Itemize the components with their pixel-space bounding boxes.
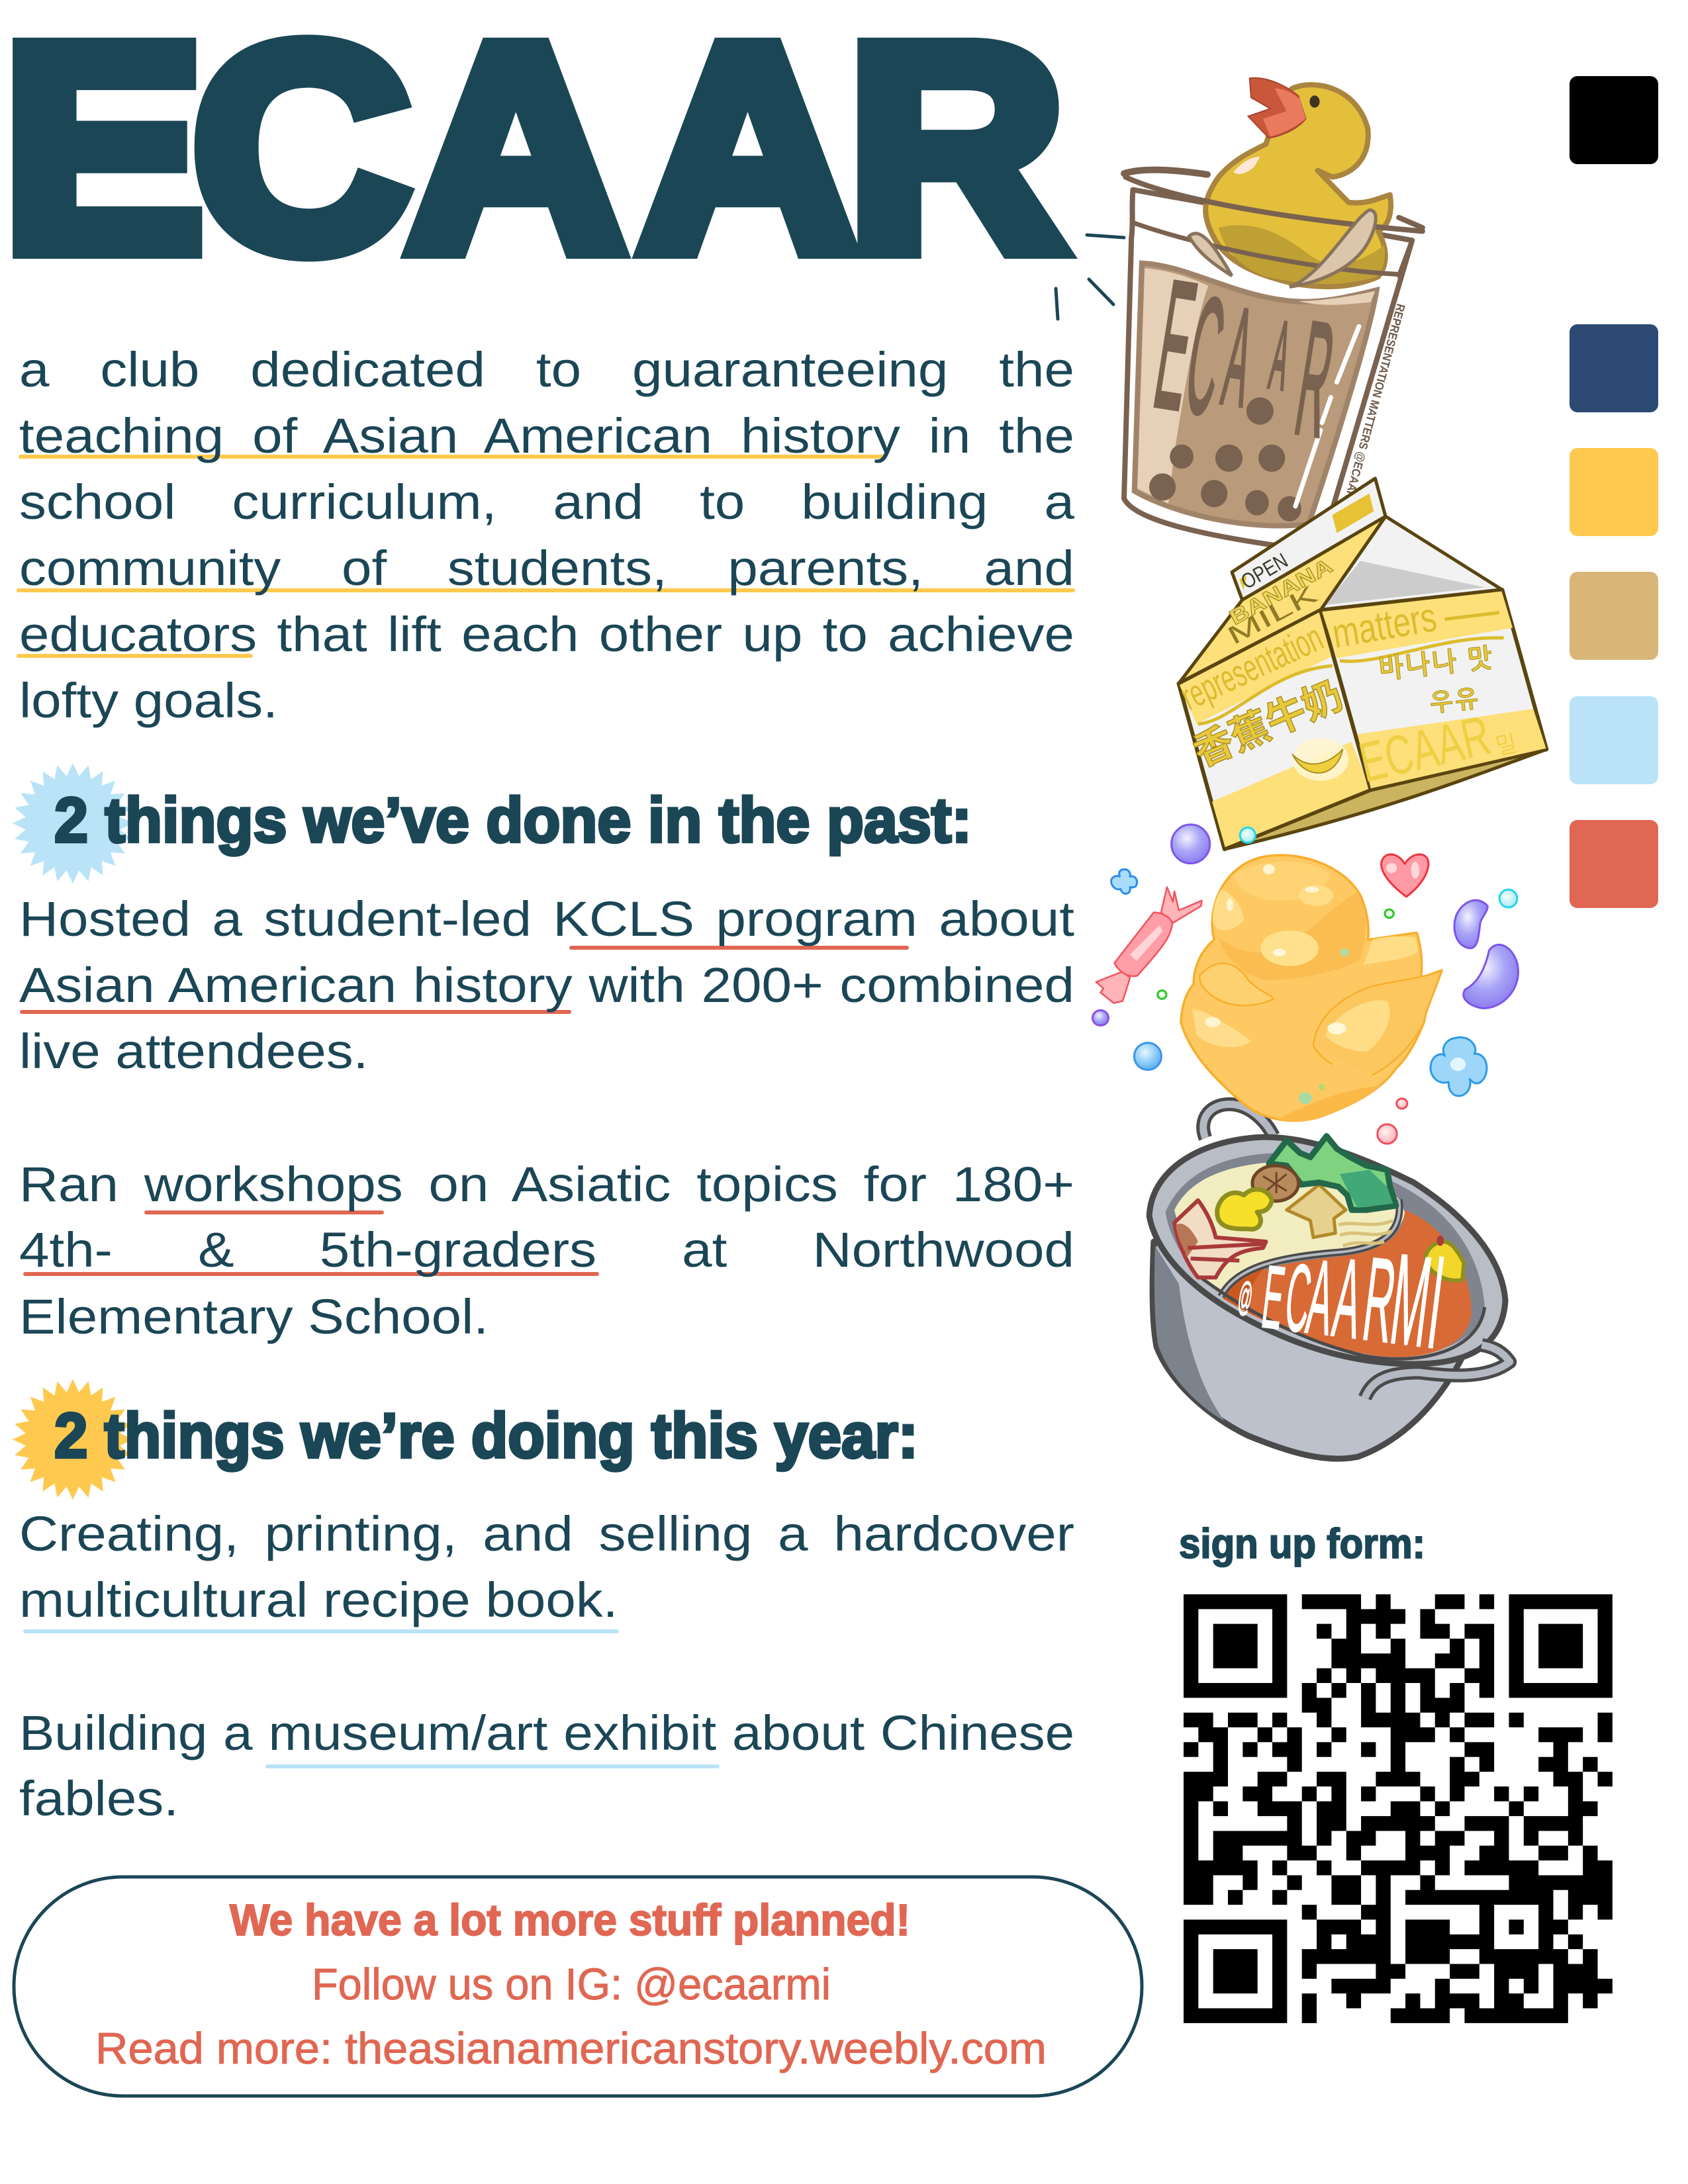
candy <box>1096 887 1202 1003</box>
text block: club description: community of students, parents, and <box>19 541 1074 596</box>
carton lettering: BANANA <box>1225 553 1336 629</box>
cup lettering: R <box>1287 287 1344 471</box>
callout: plans and links <box>14 1877 1142 2096</box>
underlines: intro (yellow) <box>19 457 1073 656</box>
carton lettering: matters <box>1329 594 1440 657</box>
bacon <box>1174 1201 1266 1277</box>
text block: KCLS program: Hosted a student-led KCLS program about <box>19 891 1074 946</box>
large blue flower <box>1430 1037 1487 1096</box>
underlines: this year (light blue) <box>25 1631 718 1766</box>
pot rim front line <box>1198 1275 1485 1359</box>
small duck left <box>1217 1189 1272 1229</box>
cup lettering: E <box>1145 242 1207 448</box>
text block: club description <box>19 342 1074 728</box>
callout line: website: Read more: theasianamericanstory.weebly.com <box>95 2024 1047 2073</box>
text block: club description: lofty goals. <box>19 673 278 728</box>
underlines: past (red) <box>22 948 907 1274</box>
small duck right <box>1426 1242 1464 1281</box>
motion dashes beside cup <box>1056 235 1124 319</box>
greens <box>1269 1136 1396 1210</box>
pot side handle <box>1365 1345 1510 1398</box>
carton lettering: 바나나 맛 <box>1377 644 1493 682</box>
heading: things done in the past: 2 things we’ve done in the past: <box>54 785 972 856</box>
text block: museum exhibit: Building a museum/art exhibit about Chinese <box>19 1706 1074 1760</box>
text block: club description: school curriculum, and to building a <box>19 475 1074 529</box>
text block: KCLS program <box>19 891 1074 1079</box>
carton lettering: representation <box>1174 616 1329 719</box>
text block: workshops <box>19 1157 1074 1344</box>
text block: museum exhibit <box>19 1706 1074 1826</box>
text block: KCLS program: Asian American history with 200+ combined <box>19 958 1074 1013</box>
text block: club description: a club dedicated to guaranteeing the <box>19 342 1074 397</box>
text block: recipe book <box>19 1506 1074 1627</box>
pot rim <box>1149 1137 1505 1364</box>
pot lettering: C <box>1280 1244 1317 1353</box>
pot lettering: A <box>1301 1238 1340 1358</box>
carton lettering <box>1174 548 1519 794</box>
noodles <box>1338 1220 1393 1246</box>
pot lettering: @ <box>1236 1274 1255 1320</box>
tofu <box>1287 1185 1346 1238</box>
heading: things doing this year: 2 things we’re doing this year: <box>54 1400 918 1471</box>
text block: recipe book: multicultural recipe book. <box>19 1572 618 1627</box>
illustration: banana milk carton <box>1174 478 1546 849</box>
jelly beans <box>1454 900 1487 948</box>
text block: club description: teaching of Asian American history in the <box>19 408 1074 463</box>
illustration: jelly duck and candy <box>1092 825 1518 1144</box>
callout line: plans: We have a lot more stuff planned! <box>230 1895 910 1945</box>
text block: museum exhibit: fables. <box>19 1771 179 1826</box>
pot top handle <box>1203 1105 1274 1138</box>
color palette swatches <box>1570 76 1658 908</box>
cup side text: REPRESENTATION MATTERS @ECAARMI <box>1340 302 1407 512</box>
small blue flower <box>1111 870 1137 893</box>
rubber duck <box>1205 78 1391 287</box>
text block: KCLS program: live attendees. <box>19 1024 368 1079</box>
carton lettering: 우유 <box>1429 687 1479 715</box>
pot lettering: E <box>1257 1248 1289 1348</box>
carton lettering: 밀 <box>1493 731 1519 758</box>
illustration: bubble tea cup with rubber duck <box>1124 78 1423 545</box>
text block: workshops: 4th- & 5th-graders at Northwood <box>19 1222 1074 1277</box>
carton lettering: 香蕉牛奶 <box>1183 663 1350 778</box>
jelly duck body <box>1181 855 1442 1120</box>
text block: workshops: Ran workshops on Asiatic topics for 180+ <box>19 1157 1074 1212</box>
pot lettering: A <box>1327 1234 1368 1362</box>
text block: recipe book: Creating, printing, and selling a hardcover <box>19 1506 1074 1561</box>
mushroom <box>1252 1165 1299 1201</box>
spicy side <box>1223 1210 1472 1357</box>
broth side <box>1174 1161 1405 1297</box>
callout line: instagram: Follow us on IG: @ecaarmi <box>312 1960 831 2009</box>
carton lettering: ECAAR <box>1354 704 1496 794</box>
pot lettering: M <box>1384 1226 1438 1374</box>
cup lettering: A <box>1264 302 1297 410</box>
cup lettering: C <box>1176 262 1235 449</box>
label: sign up form: sign up form: <box>1179 1521 1425 1567</box>
pot lettering: R <box>1357 1232 1402 1368</box>
pot body <box>1152 1242 1461 1459</box>
cup lettering: A <box>1215 279 1262 435</box>
carton lettering: OPEN <box>1237 548 1291 594</box>
heart <box>1382 854 1429 897</box>
badge: light blue starburst <box>13 763 133 884</box>
divider <box>1221 1199 1399 1297</box>
bubbles <box>1172 825 1210 864</box>
carton lettering: MILK <box>1223 580 1322 651</box>
QR code <box>1184 1594 1613 2023</box>
text block: workshops: Elementary School. <box>19 1289 489 1344</box>
illustration: hot pot <box>1149 1105 1510 1459</box>
text block: club description: educators that lift each other up to achieve <box>19 607 1074 662</box>
pot lettering: I <box>1421 1228 1452 1377</box>
badge: yellow starburst <box>13 1379 133 1500</box>
